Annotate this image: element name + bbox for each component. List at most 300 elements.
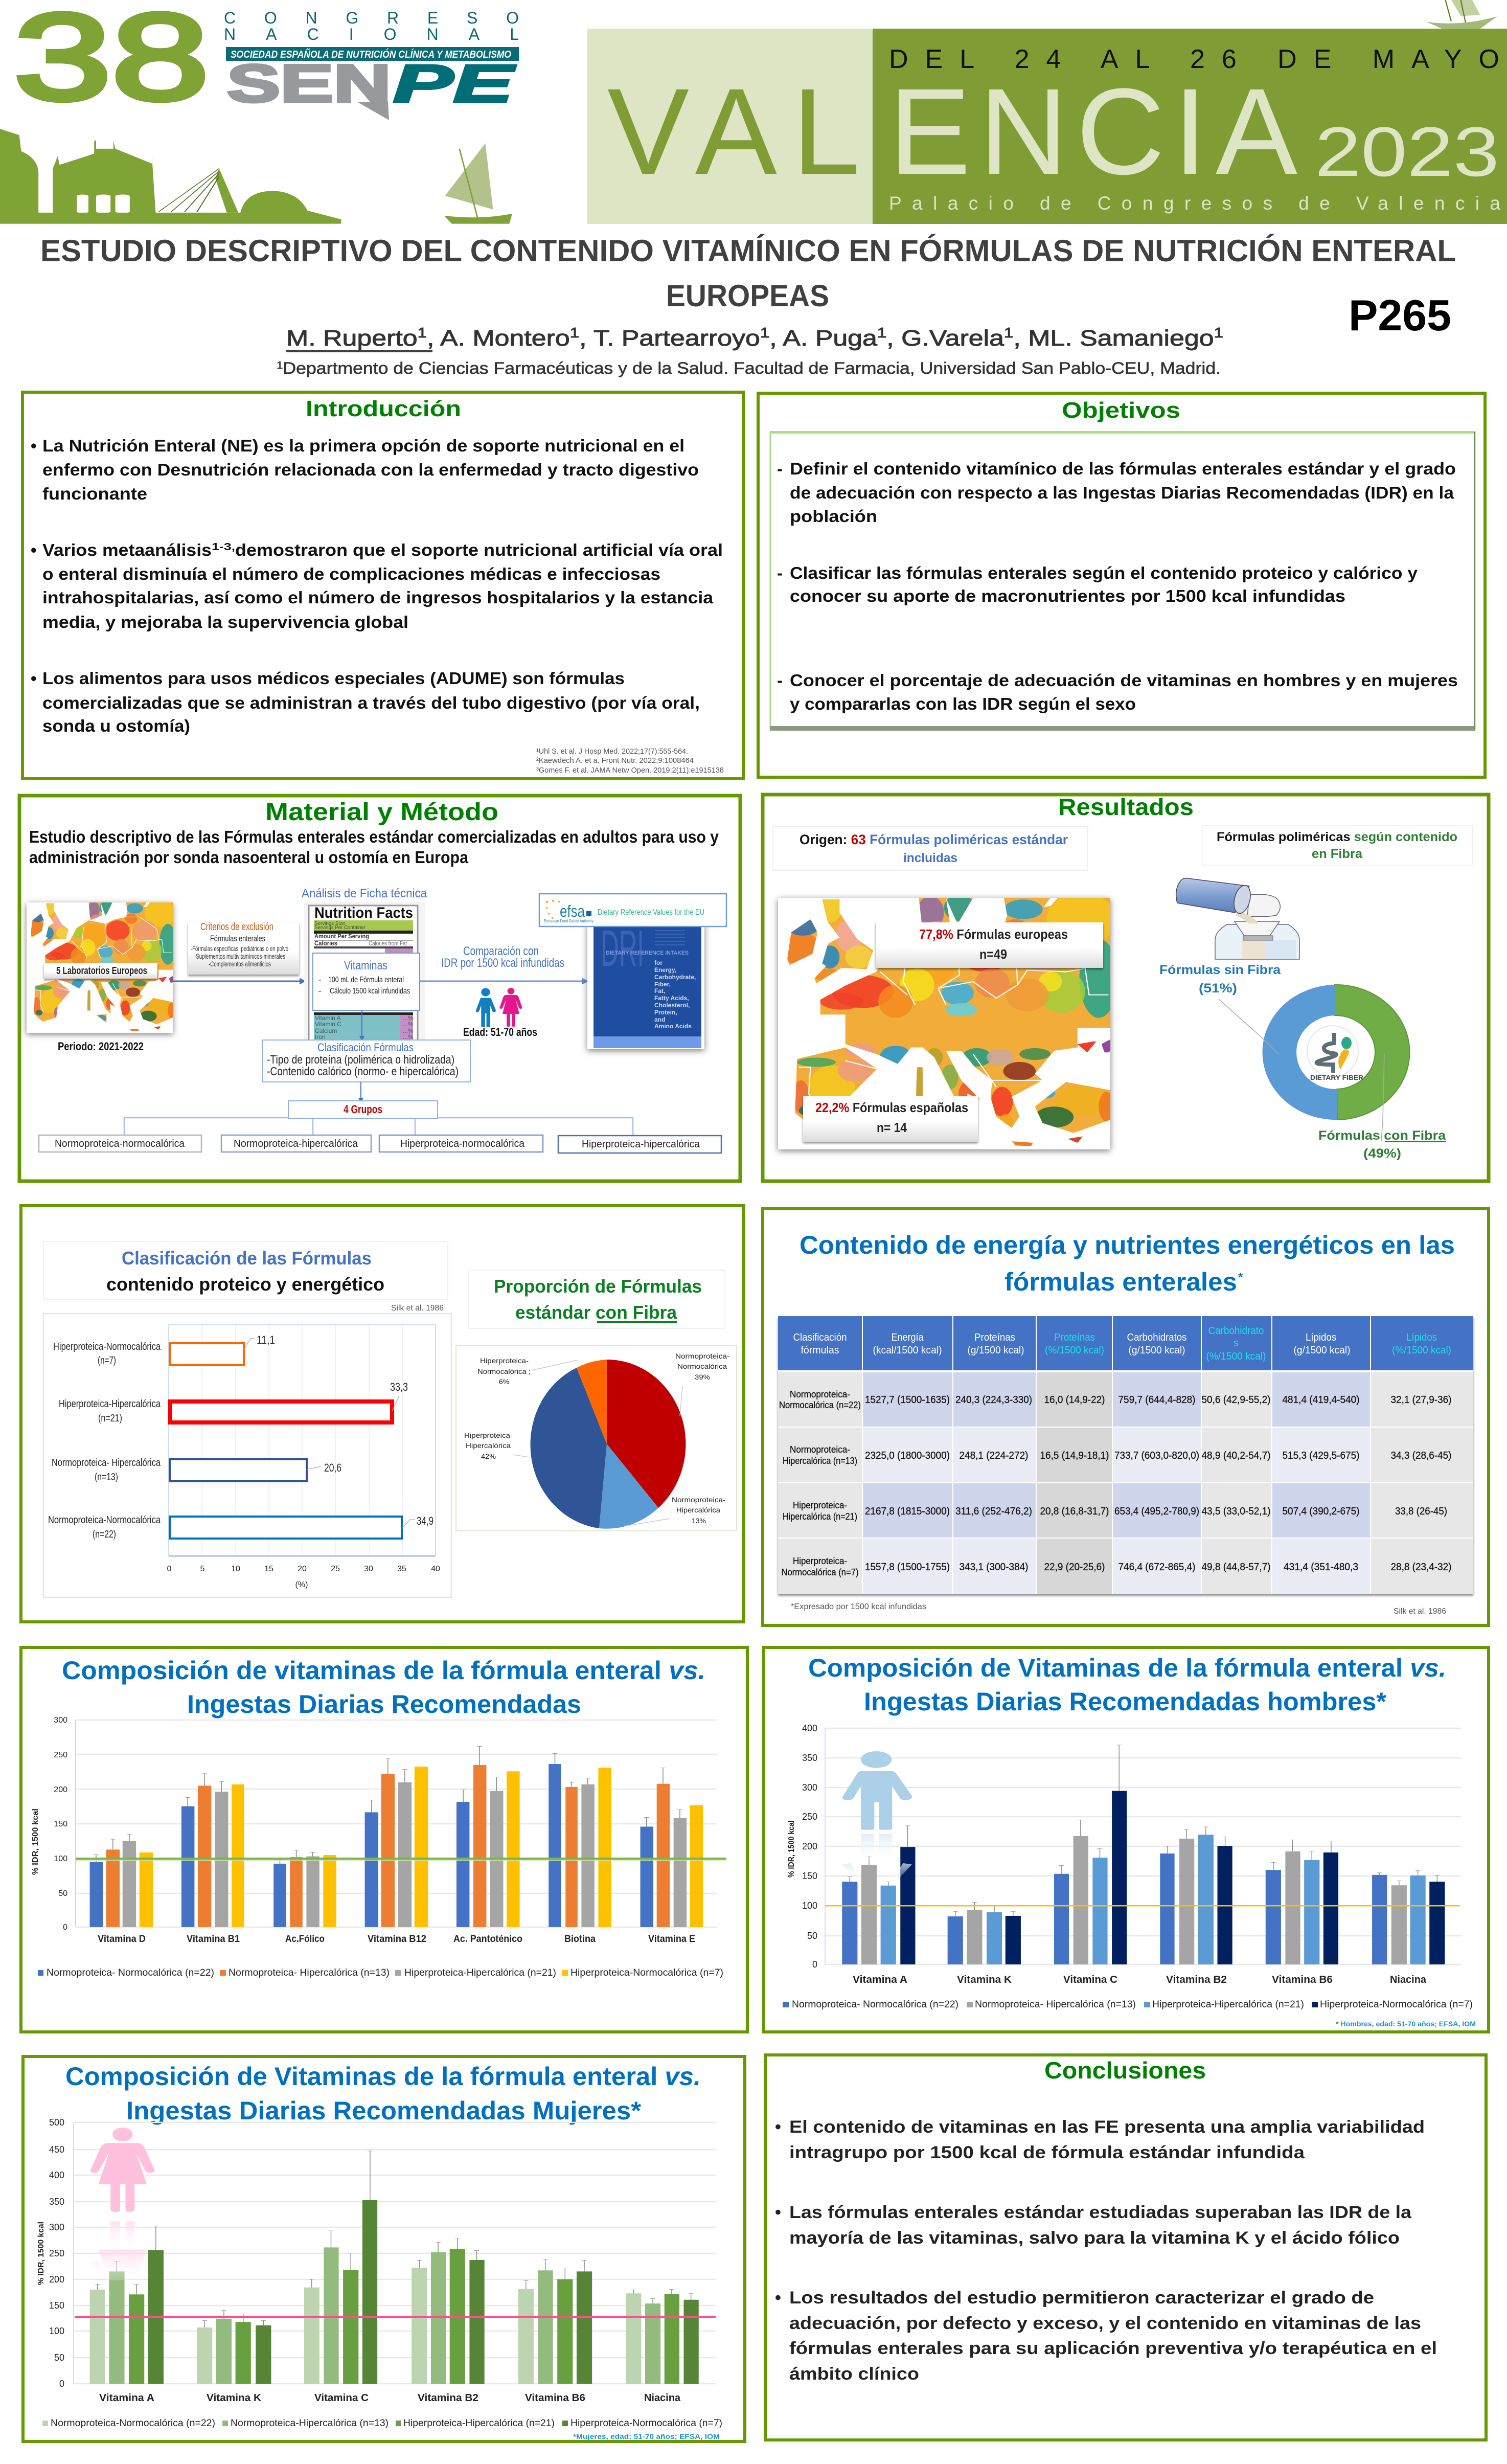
origin box: incluidas	[903, 851, 957, 865]
map: european laboratories	[26, 900, 176, 1033]
table body: 653,4 (495,2-780,9)	[1114, 1506, 1199, 1517]
pie chart: Hiperproteica-	[480, 1357, 529, 1365]
text: objectives: y compararlas con las IDR según el sexo	[790, 694, 1136, 713]
horizontal bar chart: Normoproteica- Hipercalórica	[52, 1457, 161, 1468]
table body: 20,8 (16,8-31,7)	[1040, 1506, 1109, 1517]
legend	[783, 1999, 1473, 2010]
bar chart: women: Vitamina C	[314, 2392, 369, 2404]
table body: 1527,7 (1500-1635)	[865, 1394, 950, 1406]
text: objectives	[777, 459, 1458, 713]
table body: 431,4 (351-480,3	[1284, 1562, 1358, 1573]
bar chart: women: 150	[49, 2300, 64, 2311]
heading: Composición de Vitaminas de la fórmula enteral vs.	[65, 2062, 701, 2091]
callout: spanish formulas	[803, 1096, 978, 1142]
bar chart: vitamins: 0	[63, 1923, 67, 1932]
text: intro bullets: •	[31, 436, 37, 455]
nutrition facts label: Vitamin C	[315, 1021, 341, 1028]
EFSA box: Dietary Reference Values for the EU	[598, 908, 704, 917]
footnotes: Silk et al. 1986	[1394, 1607, 1446, 1616]
bar chart: vitamins: Vitamina B1	[187, 1934, 240, 1945]
text: intro bullets: o enteral disminuía el número de complicaciones médicas e infecciosas	[42, 564, 660, 583]
authors: 1	[1214, 325, 1223, 341]
heading	[62, 1656, 705, 1719]
text: intro bullets: Los alimentos para usos médicos especiales (ADUME) son fórmulas	[42, 669, 625, 688]
text: conclusions: El contenido de vitaminas en las FE presenta una amplia variabilidad	[789, 2117, 1425, 2137]
legend: Hiperproteica-Normocalórica (n=7)	[1320, 1999, 1473, 2010]
bar chart: men: 200	[802, 1841, 817, 1851]
date and place block: ENCIA	[889, 63, 1297, 200]
table body: 43,5 (33,0-52,1)	[1201, 1506, 1271, 1517]
callout: spanish formulas: 22,2% Fórmulas españolas	[815, 1100, 968, 1115]
authors: 1	[418, 325, 427, 341]
table header: (g/1500 kcal)	[967, 1345, 1024, 1356]
group boxes: Hiperproteica-hipercalórica	[582, 1139, 700, 1150]
origin box	[773, 827, 1088, 870]
DRI book cover: and	[654, 1016, 665, 1023]
authors: 1	[877, 325, 886, 341]
heading: Ingestas Diarias Recomendadas Mujeres*	[126, 2096, 642, 2125]
vitaminas box: Cálculo 1500 kcal infundidas	[330, 987, 410, 996]
nutrition facts label: Calories from Fat ...	[369, 940, 413, 947]
table body: 311,6 (252-476,2)	[955, 1506, 1032, 1517]
icon: man	[476, 988, 496, 1027]
horizontal bar chart: 5	[200, 1565, 205, 1573]
table body: Normocalórica (n=22)	[779, 1400, 861, 1410]
bar chart: women: 500	[49, 2117, 64, 2128]
table body: 1557,8 (1500-1755)	[865, 1562, 950, 1573]
text: conclusions: intragrupo por 1500 kcal de fórmula estándar infundida	[789, 2143, 1305, 2162]
fibre heading box: Fórmulas poliméricas según contenido	[1217, 830, 1457, 844]
table body: 34,3 (28,6-45)	[1390, 1450, 1452, 1461]
age label: Edad: 51-70 años	[463, 1026, 537, 1038]
bar chart: vitamins: 250	[54, 1751, 67, 1759]
table header: Proteínas	[974, 1332, 1015, 1343]
DRI book cover: Fat,	[654, 987, 665, 994]
table body: Hipercalórica (n=13)	[783, 1456, 857, 1466]
text: objectives: Conocer el porcentaje de adecuación de vitaminas en hombres y en mujeres	[790, 671, 1458, 690]
bar chart: vitamins: Ac.Fólico	[285, 1934, 325, 1945]
logo: 38 congreso nacional SENPE: NACIONAL	[224, 25, 519, 43]
table header: (g/1500 kcal)	[1293, 1345, 1351, 1356]
references: ³Gomes F. et al. JAMA Netw Open. 2019;2(11):e1915138	[536, 766, 724, 775]
footnotes: *Expresado por 1500 kcal infundidas	[791, 1602, 926, 1611]
heading: Composición de vitaminas de la fórmula enteral vs.	[62, 1656, 705, 1685]
heading: clasificación: Clasificación de las Fórmulas	[122, 1248, 372, 1269]
table body: 507,4 (390,2-675)	[1282, 1506, 1360, 1517]
text: intro bullets: sonda u ostomía)	[42, 716, 190, 735]
horizontal bar chart: Normoproteica-Normocalórica	[48, 1514, 161, 1526]
bar chart: women: Niacina	[644, 2392, 681, 2404]
EFSA box	[539, 894, 726, 926]
footnote: *Mujeres, edad: 51-70 años; EFSA, IOM	[573, 2432, 720, 2440]
DRI book cover: for	[654, 959, 663, 966]
horizontal bar chart: 30	[364, 1565, 373, 1573]
legend	[42, 2418, 722, 2429]
authors	[286, 325, 1223, 352]
table body: 2325,0 (1800-3000)	[865, 1450, 950, 1461]
legend: Hiperproteica-Hipercalórica (n=21)	[1152, 1999, 1304, 2010]
text: conclusions: •	[775, 2203, 781, 2222]
bar chart: vitamins	[31, 1716, 726, 1945]
heading: contenido de energía: fórmulas enterales	[1004, 1268, 1237, 1296]
date and place block: DEL 24 AL 26 DE MAYO	[889, 44, 1499, 74]
icon: man	[842, 1751, 912, 1830]
logo: 38 congreso nacional SENPE	[14, 0, 519, 125]
heading: proporción de fórmulas: estándar con Fibra	[515, 1302, 677, 1323]
legend: Normoproteica- Normocalórica (n=22)	[47, 1968, 214, 1978]
legend: Hiperproteica-Hipercalórica (n=21)	[403, 2418, 555, 2429]
table body: Normoproteica-	[790, 1389, 850, 1399]
heading: material y método: Material y Método	[265, 799, 498, 826]
table header: (g/1500 kcal)	[1129, 1345, 1185, 1356]
horizontal bar chart: Hiperproteica-Normocalórica	[53, 1341, 161, 1352]
period label: Periodo: 2021-2022	[58, 1040, 144, 1053]
arrow: classification to groups	[359, 1082, 363, 1102]
4 grupos box: 4 Grupos	[344, 1103, 382, 1116]
heading: clasificación	[43, 1241, 448, 1300]
header banner	[0, 0, 1507, 224]
bar chart: men: Vitamina K	[957, 1974, 1012, 1985]
callout: european formulas	[876, 922, 1103, 968]
table header: (%/1500 kcal)	[1045, 1345, 1104, 1356]
legend: Hiperproteica-Hipercalórica (n=21)	[404, 1968, 556, 1978]
nutrition facts label: ...%	[403, 1014, 414, 1022]
pie chart: Hiperproteica-	[464, 1431, 513, 1439]
pie chart: Hipercalórica	[676, 1506, 720, 1514]
footnote: * Hombres, edad: 51-70 años; EFSA, IOM	[1336, 2020, 1476, 2028]
pie chart: Hipercalórica	[466, 1441, 511, 1450]
nutrition facts label: Servings Per Container	[314, 925, 366, 931]
horizontal bar chart: (n=22)	[93, 1529, 116, 1540]
bar chart: women	[37, 2117, 716, 2404]
vitaminas box: 100 mL de Fórmula enteral	[328, 976, 404, 984]
affiliation: Departmento de Ciencias Farmacéuticas y de la Salud. Facultad de Farmacia, Universidad San Pablo-CEU, Madrid.	[283, 359, 1221, 377]
table body: 50,6 (42,9-55,2)	[1201, 1394, 1271, 1406]
legend: Normoproteica-Hipercalórica (n=13)	[231, 2418, 389, 2429]
bar chart: women: 0	[59, 2379, 64, 2389]
legend: Normoproteica-Normocalórica (n=22)	[51, 2418, 215, 2429]
bar chart: women: 100	[49, 2326, 64, 2336]
bar chart: men: 50	[807, 1931, 817, 1941]
horizontal bar chart: 25	[331, 1565, 340, 1573]
heading: Ingestas Diarias Recomendadas hombres*	[864, 1687, 1387, 1716]
heading	[808, 1654, 1446, 1716]
table body: Hiperproteica-	[793, 1556, 847, 1566]
nutrition facts label: Calories	[314, 939, 337, 947]
text: intro bullets: enfermo con Desnutrición relacionada con la enfermedad y tracto digestivo	[42, 460, 699, 479]
title: ESTUDIO DESCRIPTIVO DEL CONTENIDO VITAMÍNICO EN FÓRMULAS DE NUTRICIÓN ENTERAL	[40, 234, 1456, 268]
nutrition facts label: ...%	[403, 1027, 414, 1034]
icon: woman	[499, 988, 522, 1027]
heading: objetivos: Objetivos	[1062, 398, 1180, 423]
fibre heading box: en Fibra	[1312, 847, 1363, 861]
label: con fibra	[1318, 1128, 1446, 1161]
pie chart: Normocalórica	[677, 1362, 727, 1370]
heading: proporción de fórmulas: Proporción de Fórmulas	[494, 1276, 702, 1297]
bar chart: women: 450	[49, 2144, 64, 2155]
DRI book cover: DIETARY REFERENCE INTAKES	[606, 950, 689, 956]
text: intro bullets: intrahospitalarias, así como el número de ingresos hospitalarios y la estancia	[42, 588, 714, 607]
table header: Energía	[892, 1332, 924, 1343]
table body: Normoproteica-	[790, 1444, 850, 1455]
authors: M. Ruperto	[286, 326, 398, 351]
exclusion criteria box: -Fórmulas específicas, pediátricas o en polvo	[191, 944, 288, 953]
authors: , A. Montero	[427, 326, 570, 351]
bar chart: women: 250	[49, 2248, 64, 2258]
bar chart: men: 300	[802, 1782, 817, 1793]
bar chart: men: 150	[802, 1871, 817, 1881]
nutrition facts label: Nutrition Facts	[314, 905, 413, 921]
horizontal bar chart: (%)	[295, 1580, 308, 1589]
bar chart: vitamins: Biotina	[564, 1934, 596, 1945]
panel: contenido de energía	[763, 1209, 1489, 1625]
arrow: map to analysis	[173, 979, 304, 984]
horizontal bar chart: (n=7)	[98, 1355, 116, 1366]
bar chart: vitamins: % IDR, 1500 kcal	[31, 1809, 40, 1875]
DRI book cover: Fatty Acids,	[654, 994, 689, 1002]
text: objectives: -	[777, 459, 783, 478]
text: intro bullets: media, y mejoraba la supervivencia global	[42, 613, 408, 631]
donut chart	[1219, 985, 1409, 1141]
date and place block: 2023	[1315, 113, 1499, 191]
heading: contenido de energía: Contenido de energía y nutrientes energéticos en las	[800, 1231, 1455, 1259]
nutrition facts label: Iron	[315, 1033, 326, 1041]
nutrition facts label: Amount Per Serving	[314, 933, 369, 940]
table body: 16,5 (14,9-18,1)	[1040, 1450, 1109, 1461]
table body: 2167,8 (1815-3000)	[865, 1506, 950, 1517]
pie chart: Normocalórica ;	[477, 1367, 531, 1375]
logo: 38 congreso nacional SENPE: SOCIEDAD ESPAÑOLA DE NUTRICIÓN CLÍNICA Y METABOLISMO	[231, 48, 511, 60]
text: objectives: conocer su aporte de macronutrientes por 1500 kcal infundidas	[790, 586, 1345, 605]
text: objectives: de adecuación con respecto a las Ingestas Diarias Recomendadas (IDR) en la	[790, 483, 1454, 502]
text: conclusions: Los resultados del estudio permitieron caracterizar el grado de	[789, 2288, 1374, 2308]
vitaminas box	[313, 953, 420, 1010]
classification box: -Contenido calórico (normo- e hipercalórica)	[267, 1065, 459, 1078]
text: intro bullets: Varios metaanálisis	[42, 540, 212, 559]
horizontal bar chart: 10	[231, 1565, 240, 1573]
bar chart: men: % IDR, 1500 kcal	[787, 1820, 796, 1878]
bar chart: vitamins: Vitamina E	[648, 1934, 695, 1945]
label: con fibra: Fórmulas con Fibra	[1318, 1128, 1446, 1143]
text: conclusions: ámbito clínico	[789, 2364, 919, 2384]
table body: 759,7 (644,4-828)	[1118, 1394, 1195, 1406]
text: intro bullets	[31, 436, 723, 735]
table body: 22,9 (20-25,6)	[1044, 1562, 1105, 1573]
bar chart: vitamins: 150	[54, 1820, 67, 1828]
text: intro bullets: comercializadas que se administran a través del tubo digestivo (por vía oral,	[42, 693, 700, 712]
text: objectives: -	[777, 671, 783, 690]
text: objectives: -	[777, 563, 783, 582]
date and place block: Palacio de Congresos de Valencia	[889, 193, 1500, 214]
date and place block	[587, 0, 1507, 224]
pie chart: 39%	[695, 1373, 710, 1381]
text: study description: Estudio descriptivo de las Fórmulas enterales estándar comercializadas en adultos para uso y	[29, 827, 719, 846]
table header	[793, 1325, 1451, 1362]
horizontal bar chart: 40	[431, 1565, 440, 1573]
vitaminas box: -	[318, 976, 321, 984]
bar chart: women: Vitamina B2	[418, 2392, 478, 2404]
text: comparison	[441, 944, 564, 970]
horizontal bar chart: 20,6	[324, 1461, 341, 1474]
label: sin fibra	[1159, 963, 1281, 996]
bar chart: men: Niacina	[1390, 1974, 1427, 1985]
heading: análisis de ficha técnica: Análisis de Ficha técnica	[302, 887, 427, 900]
table body: 733,7 (603,0-820,0)	[1114, 1450, 1199, 1461]
bar chart: men: 0	[812, 1959, 817, 1970]
map: origin of formulas	[776, 893, 1118, 1149]
authors: 1	[570, 325, 579, 341]
references: ¹Uhl S. et al. J Hosp Med. 2022;17(7):555-564.	[536, 747, 688, 756]
pie chart: 42%	[481, 1452, 496, 1460]
title: EUROPEAS	[666, 279, 829, 313]
bar chart: women: 300	[49, 2222, 64, 2232]
text: comparison: Comparación con	[463, 944, 539, 958]
logo: 38 congreso nacional SENPE: CONGRESO	[224, 9, 519, 27]
heading: clasificación: contenido proteico y energético	[106, 1274, 384, 1295]
bar chart: vitamins: 300	[54, 1716, 67, 1725]
table header: Carbohidrato	[1208, 1325, 1264, 1337]
vitaminas box: -	[318, 987, 321, 996]
legend: Normoproteica- Hipercalórica (n=13)	[975, 1999, 1136, 2010]
bar chart: women: Vitamina A	[99, 2392, 154, 2404]
text: objectives: Clasificar las fórmulas enterales según el contenido proteico y calórico y	[790, 563, 1418, 582]
text: study description: administración por sonda nasoenteral u ostomía en Europa	[29, 848, 469, 867]
vitaminas box: Vitaminas	[344, 959, 387, 973]
logo: 38 congreso nacional SENPE: SEN	[227, 54, 391, 114]
classification box: -Tipo de proteína (polimérica o hidrolizada)	[267, 1053, 454, 1066]
horizontal bar chart: 0	[167, 1565, 172, 1573]
bar chart: vitamins: Vitamina B12	[368, 1934, 426, 1945]
table body: 49,8 (44,8-57,7)	[1201, 1562, 1271, 1573]
text: conclusions: Las fórmulas enterales estándar estudiadas superaban las IDR de la	[789, 2203, 1412, 2222]
group boxes: Normoproteica-normocalórica	[55, 1138, 185, 1149]
table header: Clasificación	[793, 1332, 847, 1343]
group boxes	[39, 1135, 721, 1153]
panel: vitaminas mujeres	[23, 2056, 745, 2442]
bar chart: men	[787, 1723, 1461, 1985]
4 grupos box	[124, 1101, 633, 1135]
label: sin fibra: Fórmulas sin Fibra	[1159, 963, 1281, 977]
bar chart: women: Vitamina B6	[525, 2392, 585, 2404]
exclusion criteria box: Criterios de exclusión	[200, 921, 273, 933]
horizontal bar chart	[43, 1314, 451, 1597]
origin box: Origen: 63 Fórmulas poliméricas estándar	[800, 832, 1068, 847]
exclusion criteria box: Fórmulas enterales	[210, 934, 265, 943]
table header: Lípidos	[1406, 1332, 1437, 1343]
panel: introducción	[22, 392, 743, 779]
text: objectives: Definir el contenido vitamínico de las fórmulas enterales estándar y el grado	[790, 459, 1456, 478]
table header: (%/1500 kcal)	[1206, 1351, 1266, 1362]
citation: Silk et al. 1986	[391, 1304, 444, 1313]
horizontal bar chart: (n=13)	[95, 1472, 118, 1483]
text: intro bullets: La Nutrición Enteral (NE) es la primera opción de soporte nutricional en el	[42, 436, 684, 455]
EFSA box: efsa	[560, 902, 585, 920]
DRI book cover: Energy,	[654, 966, 676, 974]
text: comparison: IDR por 1500 kcal infundidas	[441, 956, 564, 970]
text: intro bullets: 1-3,	[212, 541, 235, 553]
heading: conclusiones: Conclusiones	[1044, 2057, 1206, 2084]
heading: resultados: Resultados	[1058, 794, 1194, 820]
text: intro bullets: •	[31, 540, 37, 559]
callout: spanish formulas: n= 14	[877, 1120, 907, 1135]
horizontal bar chart: 34,9	[417, 1514, 433, 1527]
text: intro bullets: funcionante	[42, 484, 147, 503]
panel: material y método	[19, 796, 740, 1181]
nutrition facts label: Calcium	[315, 1027, 337, 1034]
table body	[779, 1389, 1452, 1577]
horizontal bar chart: (n=21)	[98, 1413, 122, 1424]
pie chart: Normoproteica-	[672, 1496, 725, 1504]
bar chart: women: Vitamina K	[207, 2392, 262, 2404]
table body: 746,4 (672-865,4)	[1118, 1562, 1195, 1573]
pie chart	[456, 1346, 737, 1531]
panel: clasificación de las fórmulas	[21, 1206, 744, 1622]
group boxes: Normoproteica-hipercalórica	[234, 1138, 358, 1149]
heading: contenido de energía	[800, 1231, 1455, 1296]
DRI book cover: DRI	[601, 920, 644, 977]
table body: 343,1 (300-384)	[959, 1562, 1029, 1573]
table header: s	[1234, 1338, 1239, 1349]
icon: pouring formula into bottle	[1176, 878, 1299, 959]
legend: Hiperproteica-Normocalórica (n=7)	[570, 2418, 722, 2429]
authors: , T. Partearroyo	[579, 326, 760, 351]
map: european laboratories: 5 Laboratorios Europeos	[56, 965, 147, 977]
bar chart: men: 100	[802, 1901, 817, 1911]
table body: Hipercalórica (n=21)	[783, 1511, 857, 1522]
label: con fibra: (49%)	[1363, 1146, 1401, 1161]
text: intro bullets: demostraron que el soporte nutricional artificial vía oral	[235, 540, 723, 559]
inner box	[770, 431, 1475, 731]
horizontal bar chart: 20	[298, 1565, 307, 1573]
bar chart: men: 250	[802, 1812, 817, 1822]
text: conclusions: adecuación, por defecto y exceso, y el contenido en vitaminas de las	[789, 2314, 1421, 2333]
panel: vitaminas vs IDR	[21, 1647, 747, 2032]
callout: european formulas: n=49	[979, 946, 1007, 962]
bar chart: women: % IDR, 1500 kcal	[37, 2222, 45, 2285]
horizontal bar chart: 15	[264, 1565, 273, 1573]
DRI book cover: Fiber,	[654, 981, 671, 988]
bar chart: vitamins: 100	[54, 1855, 67, 1863]
date and place block: VAL	[607, 63, 860, 200]
heading: introducción: Introducción	[306, 396, 461, 421]
legend: Normoproteica- Hipercalórica (n=13)	[229, 1968, 390, 1978]
classification box	[262, 1040, 470, 1082]
pie chart: 6%	[499, 1377, 509, 1386]
icon: woman reflection	[90, 2222, 147, 2280]
nutrition facts label: ...%	[403, 1033, 414, 1041]
DRI book cover: Amino Acids	[654, 1023, 692, 1030]
text: objectives: población	[790, 507, 877, 526]
legend	[38, 1968, 723, 1978]
fibre heading box	[1203, 825, 1473, 865]
bar chart: men: Vitamina B2	[1166, 1974, 1227, 1985]
DRI book cover: Protein,	[654, 1009, 677, 1016]
horizontal bar chart: 11,1	[257, 1333, 275, 1346]
skyline of Valencia	[0, 129, 341, 224]
nutrition facts label: Servings Size	[314, 921, 345, 926]
legend: Hiperproteica-Normocalórica (n=7)	[570, 1968, 723, 1978]
bar chart: men: 400	[802, 1723, 817, 1733]
logo: 38 congreso nacional SENPE: PE	[393, 54, 515, 114]
nutrition facts label	[304, 902, 425, 1041]
icon: woman	[90, 2128, 154, 2212]
references	[536, 747, 724, 775]
classification box: Clasificación Fórmulas	[317, 1041, 414, 1054]
table body: 28,8 (23,4-32)	[1390, 1562, 1452, 1573]
bar chart: vitamins: 50	[58, 1889, 67, 1898]
heading	[65, 2062, 701, 2125]
authors: , G.Varela	[886, 326, 1004, 351]
